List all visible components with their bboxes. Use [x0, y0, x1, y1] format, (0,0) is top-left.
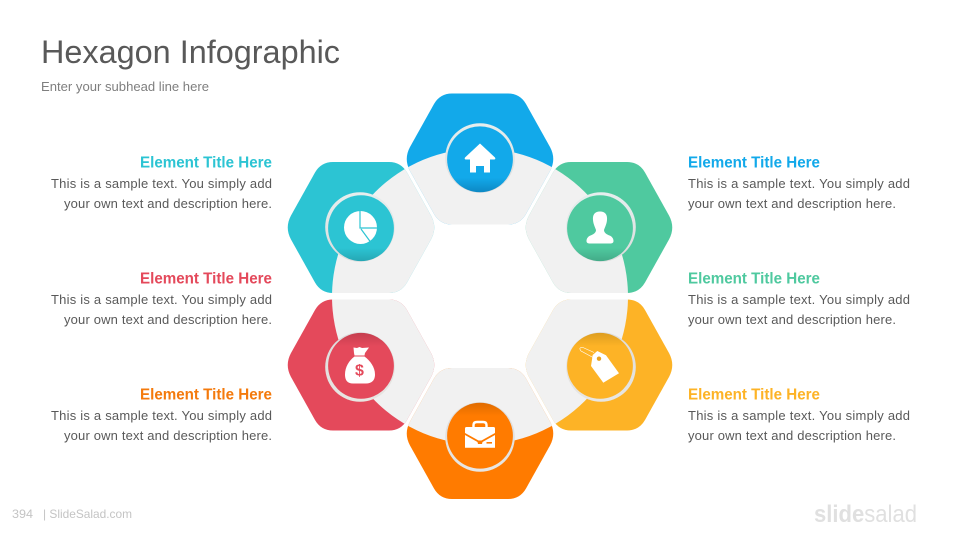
- text block: left bottom: This is a sample text. You simply add: [51, 408, 272, 423]
- title: Hexagon Infographic: [41, 34, 340, 70]
- text block: right middle: [688, 270, 910, 327]
- icon: pie chart: [344, 210, 378, 244]
- text block: right middle: your own text and description here.: [688, 312, 896, 327]
- hexagon: bottom orange: [406, 368, 554, 499]
- text block: left bottom: [51, 386, 272, 443]
- text block: right bottom: [688, 386, 910, 443]
- icon: price tag: [580, 347, 619, 383]
- text block: right top: your own text and description here.: [688, 196, 896, 211]
- icon: briefcase: [465, 422, 495, 448]
- page number: 394: [12, 507, 33, 521]
- text block: left bottom: Element Title Here: [140, 386, 272, 404]
- text block: right bottom: Element Title Here: [688, 386, 820, 404]
- hexagon: top blue: [406, 94, 554, 224]
- icon: money bag: [345, 347, 375, 384]
- text block: left middle: This is a sample text. You simply add: [51, 292, 272, 307]
- text block: left top: your own text and description here.: [64, 196, 272, 211]
- hexagon: upper left cyan: [288, 162, 434, 293]
- hexagon: lower right yellow: [526, 300, 672, 430]
- text block: left top: This is a sample text. You simply add: [51, 176, 272, 191]
- text block: left top: Element Title Here: [140, 154, 272, 172]
- hexagon: lower left red: [288, 300, 434, 430]
- hexagon: upper right green: [526, 162, 672, 293]
- text block: right middle: Element Title Here: [688, 270, 820, 288]
- icon: home: [465, 144, 495, 172]
- icon: money bag: $: [355, 362, 364, 380]
- icon: user: [586, 212, 614, 244]
- text block: right top: [688, 154, 910, 211]
- text block: right middle: This is a sample text. You simply add: [688, 292, 910, 307]
- subhead: Enter your subhead line here: [41, 80, 209, 94]
- text block: right bottom: This is a sample text. You simply add: [688, 408, 910, 423]
- text block: left top: [51, 154, 272, 211]
- logo: slidesalad: slidesalad: [814, 501, 917, 528]
- text block: left middle: your own text and description here.: [64, 312, 272, 327]
- text block: right top: Element Title Here: [688, 154, 820, 172]
- footer source: | SlideSalad.com: [43, 507, 132, 521]
- text block: left middle: [51, 270, 272, 327]
- text block: left bottom: your own text and description here.: [64, 428, 272, 443]
- text block: right top: This is a sample text. You simply add: [688, 176, 910, 191]
- text block: left middle: Element Title Here: [140, 270, 272, 288]
- text block: right bottom: your own text and description here.: [688, 428, 896, 443]
